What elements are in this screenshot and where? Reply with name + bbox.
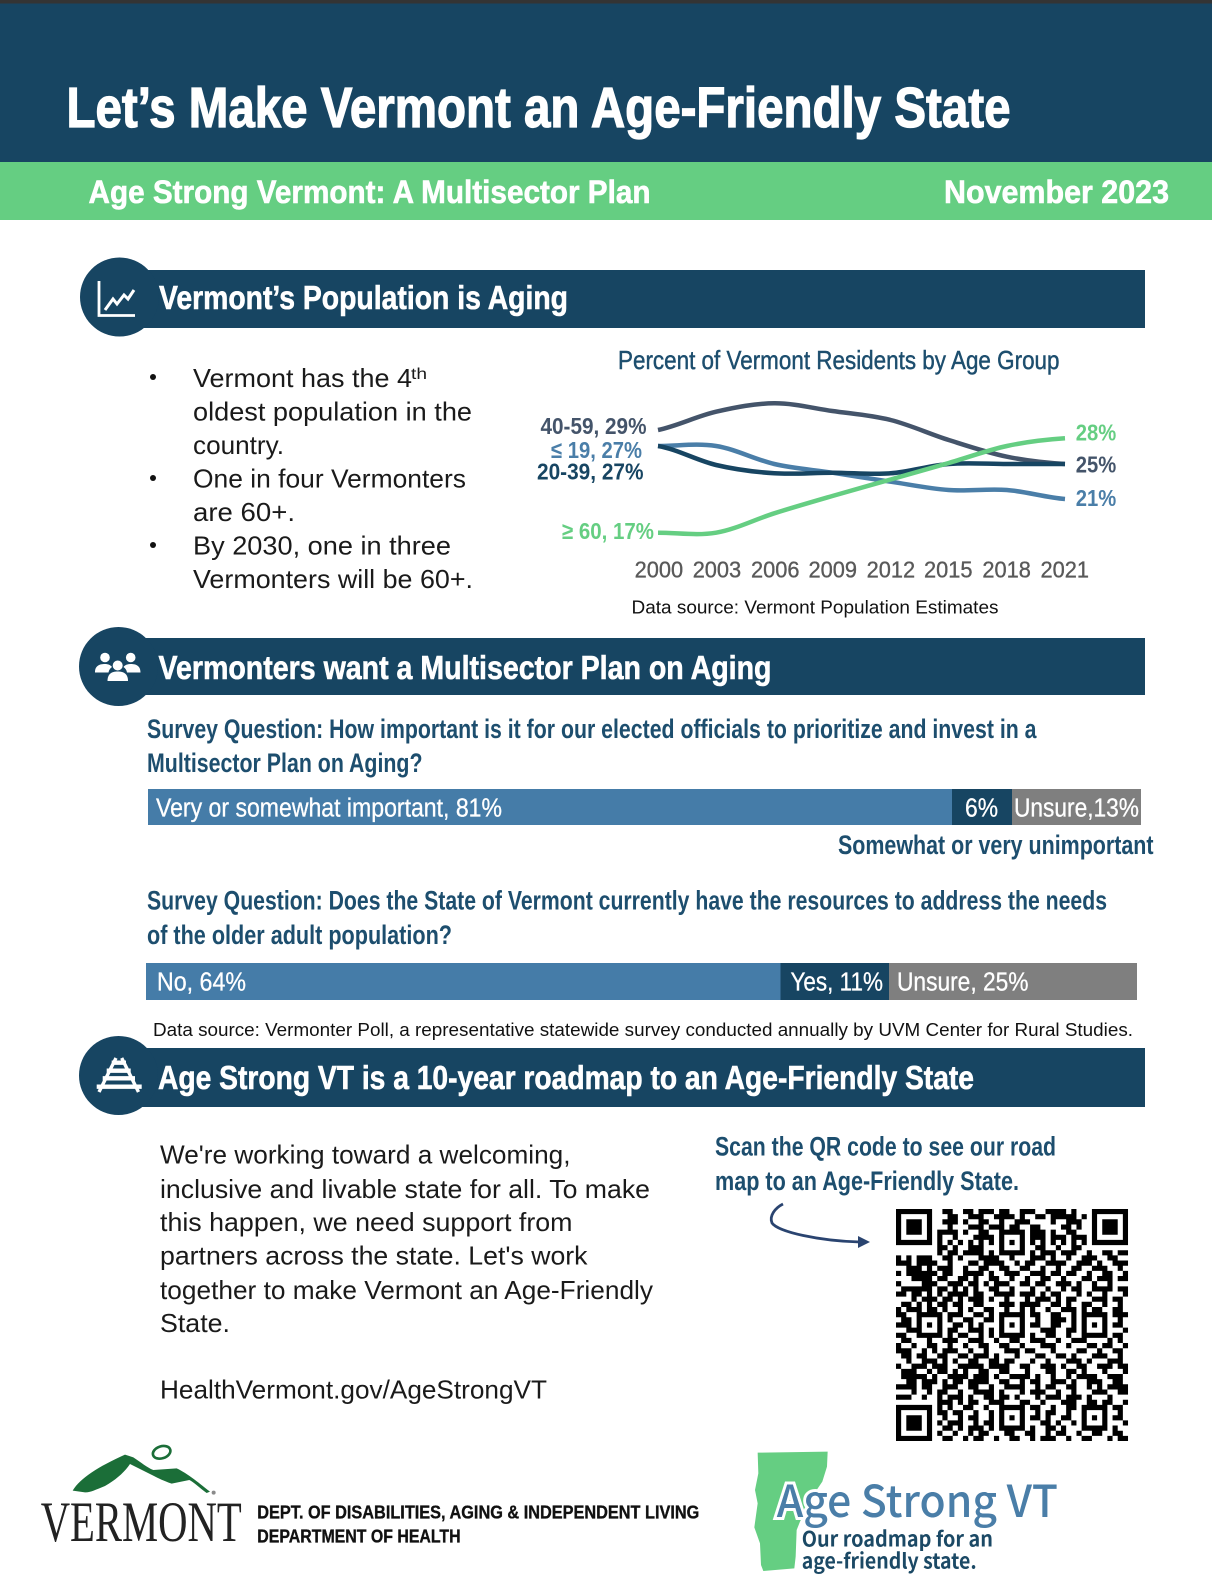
year axis labels: 2012 <box>867 556 915 582</box>
date: November 2023 <box>944 174 1169 210</box>
heading text: Vermonters want a Multisector Plan on Aging <box>158 649 772 686</box>
roadmap paragraph: We're working toward a welcoming, <box>160 1140 570 1170</box>
logo mark: green mountain <box>73 1444 216 1495</box>
survey question 2 <box>147 886 1107 950</box>
year axis labels: 2003 <box>693 556 741 582</box>
series labels <box>537 413 1116 544</box>
logo tagline <box>802 1524 993 1575</box>
stacked bar: importance: Very or somewhat important, 81% <box>156 794 502 822</box>
series labels: 25% <box>1076 452 1116 478</box>
year axis labels: 2006 <box>751 556 800 582</box>
roadmap paragraph <box>160 1140 653 1404</box>
survey data source: Data source: Vermonter Poll, a representative statewide survey conducted annually by UVM Center for Rural Studies. <box>153 1020 1133 1040</box>
title: Let’s Make Vermont an Age-Friendly State <box>66 76 1010 140</box>
logo: Age Strong VT <box>754 1452 1058 1575</box>
roadmap paragraph: partners across the state. Let's work <box>160 1240 589 1270</box>
series: 20-39 <box>658 446 1065 474</box>
survey question 2: of the older adult population? <box>147 920 452 950</box>
QR code <box>896 1212 1128 1438</box>
section heading: multisector plan <box>79 627 1145 706</box>
series labels: 28% <box>1076 420 1116 446</box>
survey question 1 <box>147 714 1037 778</box>
series labels: 40-59, 29% <box>540 413 647 439</box>
series labels: ≤ 19, 27% <box>551 437 642 463</box>
department names: DEPARTMENT OF HEALTH <box>257 1526 461 1546</box>
bullet list: One in four Vermonters <box>193 464 466 494</box>
logo wordmark: Age Strong VT <box>777 1466 1058 1530</box>
icon: people <box>95 653 140 681</box>
section heading: population aging <box>80 258 1145 336</box>
series labels: 21% <box>1076 485 1116 511</box>
logo wordmark: VERMONT <box>41 1491 242 1554</box>
roadmap paragraph: State. <box>160 1308 230 1338</box>
chart title: Percent of Vermont Residents by Age Group <box>618 345 1060 375</box>
icon: railroad track <box>97 1058 142 1092</box>
QR prompt <box>715 1132 1056 1196</box>
year axis labels: 2018 <box>982 556 1031 582</box>
series: 40-59 <box>658 403 1065 464</box>
section heading: roadmap <box>79 1036 1145 1115</box>
website: HealthVermont.gov/AgeStrongVT <box>160 1374 547 1404</box>
year axis labels: 2021 <box>1040 556 1089 582</box>
department names: DEPT. OF DISABILITIES, AGING & INDEPENDENT LIVING <box>257 1502 699 1522</box>
stacked bar: resources: Unsure, 25% <box>897 968 1028 996</box>
chart data source: Data source: Vermont Population Estimates <box>632 596 998 618</box>
stacked bar: resources: No, 64% <box>157 968 246 996</box>
year axis labels: 2009 <box>808 556 857 582</box>
subtitle: Age Strong Vermont: A Multisector Plan <box>88 174 650 210</box>
bullet list: Vermonters will be 60+. <box>193 564 473 594</box>
icon: line chart <box>99 281 135 316</box>
series labels: 20-39, 27% <box>537 458 644 484</box>
heading text: Vermont’s Population is Aging <box>159 279 568 316</box>
year axis labels: 2015 <box>924 556 972 582</box>
year axis labels: 2000 <box>635 556 683 582</box>
stacked bar: importance: 6% <box>965 794 998 822</box>
stacked bar: resources <box>146 963 1137 1000</box>
heading text: Age Strong VT is a 10-year roadmap to an Age-Friendly State <box>158 1059 974 1096</box>
stacked bar: importance: Unsure,13% <box>1014 794 1139 822</box>
arrow to QR code <box>771 1204 870 1248</box>
logo tagline: age-friendly state. <box>802 1545 977 1575</box>
stacked bar: resources: Yes, 11% <box>790 968 883 996</box>
line chart: percent of residents by age group <box>537 345 1116 618</box>
QR prompt: Scan the QR code to see our road <box>715 1132 1056 1162</box>
series labels: ≥ 60, 17% <box>562 518 654 544</box>
series: 60 plus <box>658 438 1065 534</box>
icon: Vermont state shape <box>754 1452 828 1571</box>
bullet list: are 60+. <box>193 497 295 527</box>
roadmap paragraph: inclusive and livable state for all. To make <box>160 1174 650 1204</box>
logo: State of Vermont <box>41 1444 242 1554</box>
roadmap paragraph: this happen, we need support from <box>160 1207 572 1237</box>
header banner <box>0 0 1212 162</box>
bullet list: By 2030, one in three <box>193 530 451 560</box>
year axis labels <box>635 556 1089 582</box>
stacked bar: importance <box>148 789 1141 825</box>
bullet list: oldest population in the <box>193 396 472 426</box>
series: under 19 <box>658 445 1065 499</box>
survey question 1: Multisector Plan on Aging? <box>147 748 422 778</box>
logo tagline: Our roadmap for an <box>802 1524 993 1554</box>
bullet list: th <box>411 366 427 383</box>
bullet list: country. <box>193 430 284 460</box>
QR prompt: map to an Age-Friendly State. <box>715 1166 1019 1196</box>
subtitle band <box>0 162 1212 220</box>
bullet list: Vermont has the 4 <box>193 363 412 393</box>
department names <box>257 1502 699 1546</box>
roadmap paragraph: together to make Vermont an Age-Friendly <box>160 1275 653 1305</box>
bullet list <box>150 363 473 594</box>
